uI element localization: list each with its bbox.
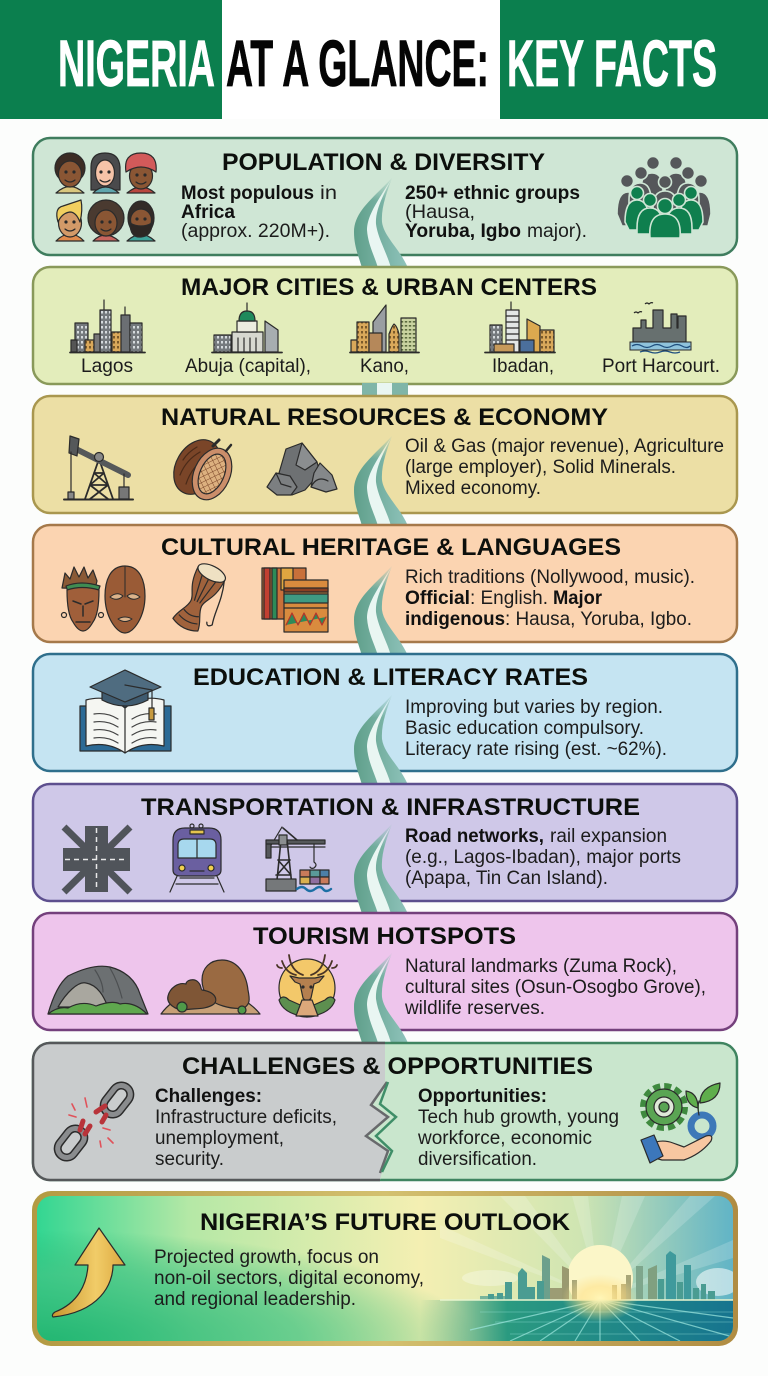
text: challenges: unemployment, — [155, 1128, 284, 1149]
heading: population: POPULATION & DIVERSITY — [222, 149, 545, 176]
text: tourism: cultural sites (Osun-Osogbo Grove), — [405, 977, 706, 998]
heading: culture: CULTURAL HERITAGE & LANGUAGES — [161, 534, 621, 561]
icon: Kano skyline — [350, 305, 419, 352]
text: transportation: (Apapa, Tin Can Island). — [405, 868, 608, 889]
text: opportunities: Opportunities: — [418, 1086, 547, 1107]
icon: cocoa pods — [164, 431, 239, 506]
icon: Zuma Rock — [48, 966, 148, 1014]
text: challenges: Infrastructure deficits, — [155, 1107, 337, 1128]
heading: transportation: TRANSPORTATION & INFRASTRUCTURE — [141, 794, 640, 821]
heading: cities: MAJOR CITIES & URBAN CENTERS — [181, 274, 597, 301]
icon: port crane — [266, 827, 331, 891]
text: culture: : English. — [470, 588, 548, 609]
label: Lagos: Lagos — [81, 356, 133, 377]
text: education: Literacy rate rising (est. ~62%). — [405, 739, 667, 760]
text: opportunities: diversification. — [418, 1149, 537, 1170]
icon: rising gold arrow — [52, 1228, 125, 1317]
river segment 1 — [354, 178, 408, 268]
text: challenges: Challenges: — [155, 1086, 262, 1107]
icon: crowd of people — [617, 156, 711, 238]
icon: Abuja capitol — [212, 303, 282, 352]
text: most populous — [181, 183, 337, 242]
river segment 6 — [354, 824, 408, 914]
text: most populous: Most populous — [181, 183, 314, 204]
heading: outlook: NIGERIA’S FUTURE OUTLOOK — [200, 1209, 571, 1236]
text: ethnic groups: major). — [527, 221, 587, 242]
text: tourism: Natural landmarks (Zuma Rock), — [405, 956, 677, 977]
icon: djembe drum — [170, 560, 236, 639]
label: Abuja: Abuja (capital), — [185, 356, 311, 377]
label: Port Harcourt: Port Harcourt. — [602, 356, 720, 377]
text: culture: Rich traditions (Nollywood, music). — [405, 567, 695, 588]
text: transportation: rail expansion — [550, 826, 667, 847]
text: ethnic groups: 250+ ethnic groups — [405, 183, 580, 204]
icon: tribal masks — [62, 566, 145, 633]
panel: population and diversity — [33, 138, 737, 255]
text: culture: indigenous — [405, 609, 505, 630]
text: most populous: (approx. 220M+). — [181, 221, 330, 242]
icon: patterned textiles — [262, 568, 328, 632]
icon: Port Harcourt waterfront — [630, 303, 691, 353]
title banner: NIGERIA — [58, 26, 215, 100]
panel: future outlook — [32, 1191, 740, 1346]
label: Kano: Kano, — [360, 356, 409, 377]
icon: broken chain — [54, 1082, 134, 1161]
icon: six diverse faces — [55, 153, 156, 241]
panel: major cities — [33, 267, 737, 384]
divider: lightning split — [366, 1082, 396, 1173]
icon: road junction — [63, 826, 130, 892]
text: outlook — [154, 1247, 424, 1310]
text: resources: (large employer), Solid Minerals. — [405, 457, 676, 478]
text: outlook: non-oil sectors, digital economy, — [154, 1268, 424, 1289]
text: outlook: Projected growth, focus on — [154, 1247, 379, 1268]
heading: challenges: CHALLENGES & OPPORTUNITIES — [182, 1053, 593, 1080]
text: culture: : Hausa, Yoruba, Igbo. — [505, 609, 692, 630]
icon: oil pump — [64, 436, 133, 500]
heading: education: EDUCATION & LITERACY RATES — [193, 664, 588, 691]
title banner — [0, 0, 768, 119]
text: most populous: Africa — [181, 202, 235, 223]
text: tourism: wildlife reserves. — [404, 998, 545, 1019]
icon: Lagos skyline — [70, 300, 145, 352]
panel: transportation — [33, 784, 737, 901]
title banner: AT A GLANCE: — [226, 26, 489, 100]
label: Ibadan: Ibadan, — [492, 356, 554, 377]
icon: mineral rocks — [267, 443, 337, 495]
text: culture: Major — [553, 588, 603, 609]
skyline in the distance — [480, 1251, 715, 1300]
panel: challenges and opportunities — [33, 1043, 737, 1180]
heading: tourism: TOURISM HOTSPOTS — [253, 923, 516, 950]
river segment 4 — [354, 566, 408, 656]
icon: train — [170, 824, 224, 892]
text: transportation: (e.g., Lagos-Ibadan), major ports — [405, 847, 681, 868]
text: education — [405, 697, 667, 760]
text: challenges — [155, 1086, 337, 1170]
icon: deer medallion — [277, 955, 337, 1017]
text: tourism — [404, 956, 706, 1019]
text: ethnic groups: (Hausa, — [405, 202, 475, 223]
text: education: Improving but varies by region. — [405, 697, 663, 718]
icon: Ibadan skyline — [485, 302, 555, 352]
text: most populous: in — [320, 183, 337, 204]
icon: gears, sprout and hand — [641, 1083, 720, 1163]
river segment 5 — [354, 695, 408, 785]
heading: resources: NATURAL RESOURCES & ECONOMY — [161, 404, 608, 431]
text: opportunities — [417, 1086, 619, 1170]
text: ethnic groups: Yoruba, Igbo — [405, 221, 521, 242]
river segment 7 — [354, 953, 408, 1043]
river segment 3 — [354, 436, 408, 526]
river connector between cities and resources — [362, 383, 408, 396]
text: challenges: security. — [155, 1149, 224, 1170]
text: opportunities: workforce, economic — [417, 1128, 592, 1149]
panel: cultural heritage — [33, 525, 737, 642]
text: resources: Oil & Gas (major revenue), Agriculture — [405, 436, 724, 457]
text: outlook: and regional leadership. — [154, 1289, 356, 1310]
text: ethnic groups — [405, 183, 587, 242]
text: transportation: Road networks, — [405, 826, 544, 847]
icon: book and graduation cap — [80, 670, 171, 753]
text: culture — [405, 567, 695, 630]
text: education: Basic education compulsory. — [405, 718, 644, 739]
panel: natural resources — [33, 396, 737, 513]
text: resources: Mixed economy. — [405, 478, 541, 499]
icon: rock formation — [161, 960, 260, 1014]
text: opportunities: Tech hub growth, young — [418, 1107, 619, 1128]
text: resources — [405, 436, 724, 499]
text: culture: Official — [405, 588, 470, 609]
panel: tourism — [33, 913, 737, 1030]
text: transportation — [405, 826, 681, 889]
panel: education — [33, 654, 737, 771]
